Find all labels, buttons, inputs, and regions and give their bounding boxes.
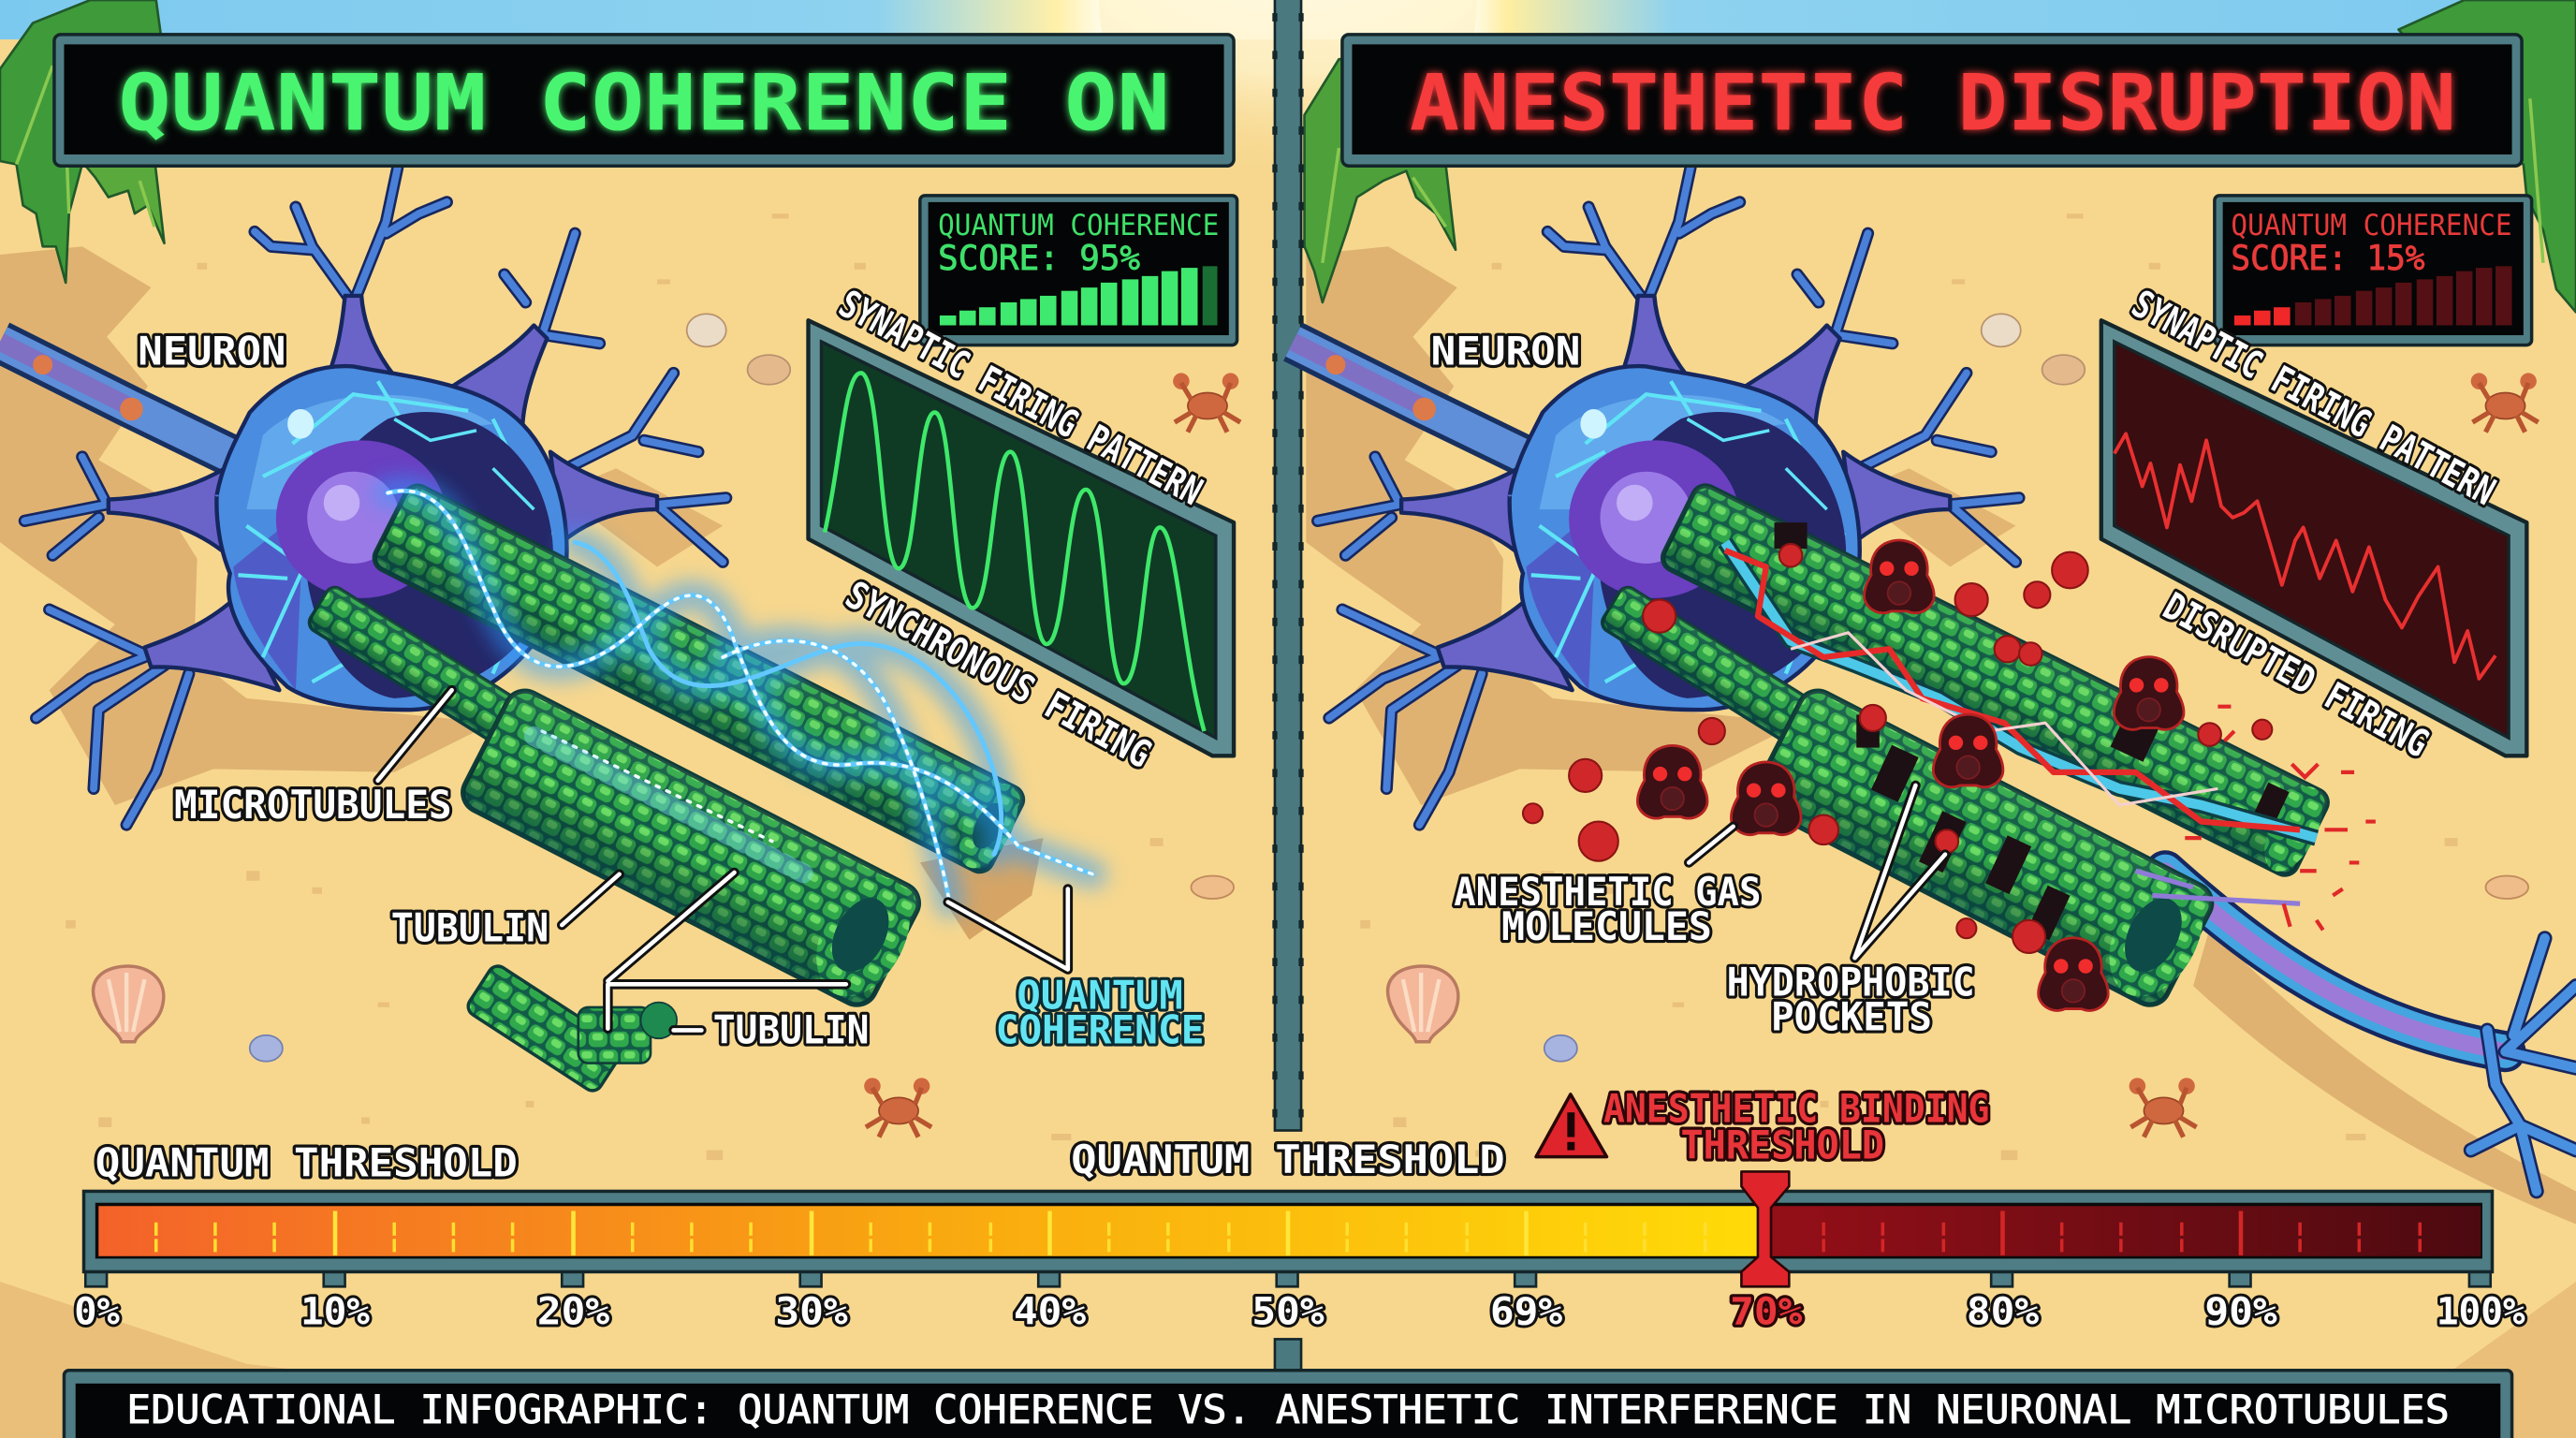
disruption lightning: [1725, 542, 2317, 903]
gas mask icon 6: [2039, 938, 2108, 1010]
label: tubulin lower: TUBULIN: [713, 1006, 869, 1052]
red danger zone: [1763, 1206, 2481, 1256]
gas mask icon 4: [1731, 762, 1801, 835]
label: synaptic firing pattern left: SYNAPTIC FIRING PATTERN: [832, 282, 1209, 514]
microtubules right: [1599, 481, 2334, 1014]
microtubules left: [306, 481, 1030, 1094]
title: anesthetic disruption: ANESTHETIC DISRUPTION: [1410, 59, 2456, 149]
axis labels: 70%: [1730, 1290, 1803, 1334]
label: quantum coherence: QUANTUM: [1017, 973, 1183, 1019]
axis labels: 10%: [300, 1290, 371, 1334]
score label: QUANTUM COHERENCE: [938, 209, 1219, 242]
hydrophobic pockets: [1775, 522, 2290, 940]
left score panel: [920, 196, 1237, 345]
gas mask icon 2: [2114, 657, 2184, 729]
label: disrupted firing: DISRUPTED FIRING: [2156, 584, 2436, 766]
icon: crab top right: [2471, 373, 2539, 433]
ticks: [156, 1223, 1705, 1255]
icon: crab top left: [1173, 373, 1240, 433]
center divider: [1275, 0, 1301, 1375]
label: hydrophobic pockets: HYDROPHOBIC: [1727, 960, 1975, 1005]
left monitor: [809, 320, 1234, 756]
axis labels: [74, 1290, 2525, 1334]
right title panel: [1342, 35, 2522, 166]
gradient safe zone: [98, 1206, 1763, 1256]
label: tubulin upper: TUBULIN: [391, 905, 549, 951]
axis labels: 80%: [1967, 1290, 2040, 1334]
score label: QUANTUM COHERENCE: [2231, 209, 2512, 242]
disrupted waveform: [2115, 433, 2496, 679]
axis labels: 50%: [1251, 1290, 1325, 1334]
axon right: [2165, 871, 2576, 1191]
axis labels: 30%: [775, 1290, 848, 1334]
gas mask icon 5: [1637, 745, 1707, 818]
right monitor: [2101, 320, 2526, 756]
score value: SCORE: 15%: [2231, 238, 2425, 278]
icon: crab bottom left: [864, 1078, 931, 1137]
label: anesthetic gas molecules: ANESTHETIC GAS: [1454, 869, 1761, 915]
label: anesthetic binding threshold: ANESTHETIC BINDING: [1603, 1086, 1989, 1132]
score bars: [940, 266, 1218, 326]
label: microtubules: MICROTUBULES: [174, 782, 452, 828]
leader lines right: [1689, 785, 1945, 958]
axis labels: 69%: [1490, 1290, 1563, 1334]
palm: center right: [1305, 59, 1456, 302]
leader lines left: [378, 690, 1068, 1030]
footer panel: [64, 1371, 2512, 1438]
gas mask icon 1: [1865, 540, 1934, 613]
score bars: [2234, 266, 2512, 326]
axis labels: 40%: [1014, 1290, 1087, 1334]
neuron right: [1293, 168, 2019, 825]
axis labels: 90%: [2204, 1290, 2277, 1334]
neuron left: [0, 168, 726, 825]
label: anesthetic gas molecules: MOLECULES: [1501, 903, 1712, 949]
left title panel: [54, 35, 1234, 166]
label: hydrophobic pockets: POCKETS: [1771, 993, 1932, 1039]
gas mask icon 3: [1933, 714, 2003, 787]
tube shadow left: [920, 838, 1043, 940]
icon: crab bottom right: [2130, 1078, 2197, 1137]
free tubulin fragment: [464, 962, 677, 1094]
label: synchronous firing: SYNCHRONOUS FIRING: [839, 573, 1159, 777]
label: neuron left: NEURON: [138, 329, 285, 374]
label: hydrophobic pockets: [1727, 960, 1975, 1039]
beach decorations right: [1388, 314, 2528, 1062]
anesthetic gas molecules: [1523, 544, 2272, 953]
label: neuron right: NEURON: [1431, 329, 1580, 374]
icon: warning triangle: [1536, 1094, 1606, 1157]
background: sky and sun: [0, 0, 2576, 181]
label: anesthetic binding threshold: [1603, 1086, 1989, 1167]
footer caption: EDUCATIONAL INFOGRAPHIC: QUANTUM COHERENCE VS. ANESTHETIC INTERFERENCE IN NEURONAL MICROTUBULES: [126, 1387, 2450, 1432]
axis labels: 20%: [537, 1290, 610, 1334]
axis labels: 100%: [2437, 1290, 2525, 1334]
axis labels: 0%: [74, 1290, 121, 1334]
palm: top right: [2398, 0, 2576, 312]
palm: top left: [0, 0, 165, 283]
threshold scale bar: [84, 1191, 2492, 1286]
label: anesthetic gas molecules: [1454, 869, 1761, 949]
quantum coherence wave: [388, 491, 1092, 903]
threshold marker: [1741, 1171, 1789, 1286]
red debris: [2185, 707, 2376, 930]
label: quantum threshold left: QUANTUM THRESHOLD: [95, 1140, 518, 1186]
right score panel: [2215, 196, 2532, 345]
title: quantum coherence on: QUANTUM COHERENCE ON: [118, 59, 1170, 149]
beach decorations left: [94, 314, 1234, 1062]
bar feet: [85, 1269, 2491, 1286]
label: quantum coherence: COHERENCE: [996, 1006, 1204, 1052]
score value: SCORE: 95%: [938, 238, 1140, 278]
label: quantum threshold center: QUANTUM THRESHOLD: [1071, 1137, 1505, 1182]
sine waveform: [825, 373, 1204, 731]
label: anesthetic binding threshold: THRESHOLD: [1680, 1122, 1884, 1167]
label: quantum coherence: [996, 973, 1204, 1052]
